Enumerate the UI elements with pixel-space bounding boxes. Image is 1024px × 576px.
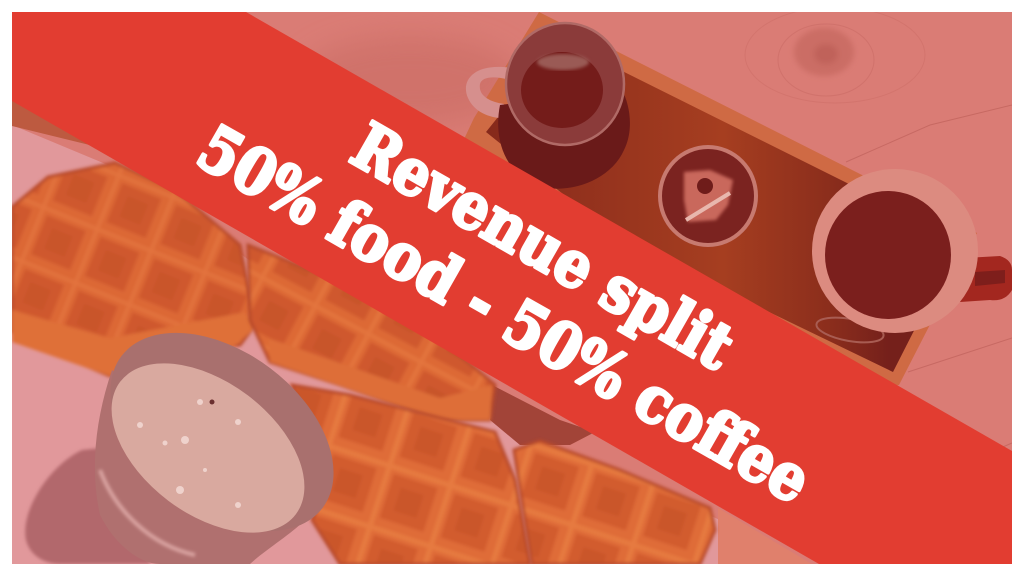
wood knot <box>794 28 854 76</box>
waffle 4 <box>514 441 715 564</box>
bowl body <box>95 370 305 564</box>
carafe <box>466 23 630 189</box>
heading: Revenue split: Revenue split <box>339 109 747 385</box>
bowl shadow <box>25 445 150 564</box>
dark dish behind waffles <box>490 385 595 445</box>
table plank lines <box>778 24 1012 446</box>
tray interior <box>486 72 914 372</box>
cup handle <box>960 256 1012 302</box>
tray <box>440 12 977 400</box>
waffle 2 <box>248 245 495 420</box>
dip bowl <box>95 332 334 564</box>
waffle 1 <box>12 163 255 376</box>
table corner left <box>12 101 88 145</box>
carafe handle <box>466 67 507 118</box>
carafe glass rim <box>506 23 624 145</box>
coffee cup <box>812 169 978 333</box>
plate <box>12 125 720 564</box>
bowl metal rim <box>114 332 334 526</box>
carafe body <box>498 90 630 189</box>
waffle 3 <box>292 385 530 564</box>
table lower right <box>718 508 811 564</box>
small bowl <box>658 145 758 247</box>
coffee logo <box>816 316 884 344</box>
pastry in bowl <box>684 170 733 222</box>
tray rim <box>440 12 977 400</box>
coffee in carafe <box>521 52 603 128</box>
heading: 50% food - 50% coffee: 50% food - 50% coffee <box>185 111 823 519</box>
dip <box>112 363 304 533</box>
